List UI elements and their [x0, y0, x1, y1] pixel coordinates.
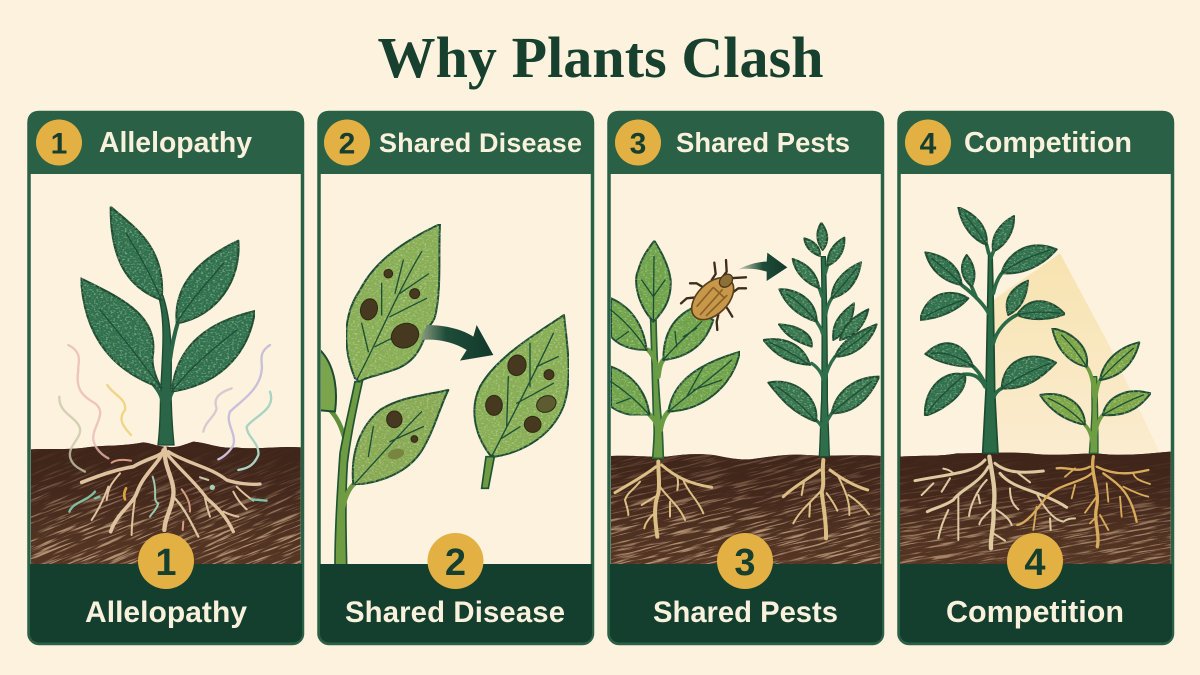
- panel: allelopathy: [27, 110, 304, 646]
- footer badge 2: [428, 533, 484, 589]
- footer badge 3: [717, 533, 773, 589]
- illustration: tall and small plants competing: [900, 207, 1171, 564]
- header badge 3: 3: [630, 128, 646, 160]
- header label: Shared Pests: [676, 127, 850, 158]
- footer badge 1: 1: [155, 542, 177, 584]
- left plant: [611, 241, 740, 458]
- small plant: [1040, 328, 1151, 453]
- footer band: [610, 564, 882, 642]
- header badge 2: [324, 120, 370, 166]
- footer badge 4: [1007, 533, 1063, 589]
- footer band: [900, 564, 1172, 642]
- illustration: plant with leaves: [81, 207, 255, 445]
- arrow: spread between leaves: [420, 325, 493, 361]
- footer label: Shared Disease: [345, 596, 565, 629]
- footer badge 1: [138, 533, 194, 589]
- soil and roots: [0, 345, 345, 659]
- header badge 2: 2: [339, 128, 355, 160]
- footer label: Allelopathy: [85, 596, 247, 629]
- panel: shared pests: [607, 110, 884, 646]
- header label: Allelopathy: [99, 127, 252, 159]
- light beam: [993, 253, 1160, 455]
- header band: [28, 111, 304, 174]
- header badge 3: [615, 120, 661, 166]
- panel: competition: [897, 110, 1174, 646]
- arrow: pest moves to next plant: [738, 253, 787, 281]
- header badge 4: 4: [920, 128, 937, 160]
- footer badge 4: 4: [1024, 542, 1046, 584]
- illustration: diseased leaves and arrow: [317, 224, 569, 565]
- header label: Shared Disease: [379, 128, 582, 158]
- footer band: [320, 564, 592, 642]
- chemical wisps: [59, 345, 271, 472]
- right plant: [763, 223, 879, 457]
- header band: [318, 111, 594, 174]
- illustration: plants, beetle, soil: [582, 223, 909, 628]
- icon: beetle: [681, 260, 746, 330]
- title: Why Plants Clash: [378, 25, 824, 90]
- footer label: Shared Pests: [653, 597, 838, 629]
- footer band: [30, 564, 302, 642]
- header label: Competition: [964, 127, 1132, 159]
- panel: shared disease: [317, 111, 594, 644]
- header band: [898, 111, 1174, 174]
- header badge 4: [905, 120, 951, 166]
- footer badge 3: 3: [734, 542, 756, 584]
- header band: [608, 111, 884, 174]
- header badge 1: 1: [51, 128, 67, 160]
- footer badge 2: 2: [445, 542, 466, 584]
- tall plant: [920, 207, 1065, 453]
- footer label: Competition: [946, 595, 1124, 629]
- header badge 1: [36, 120, 82, 166]
